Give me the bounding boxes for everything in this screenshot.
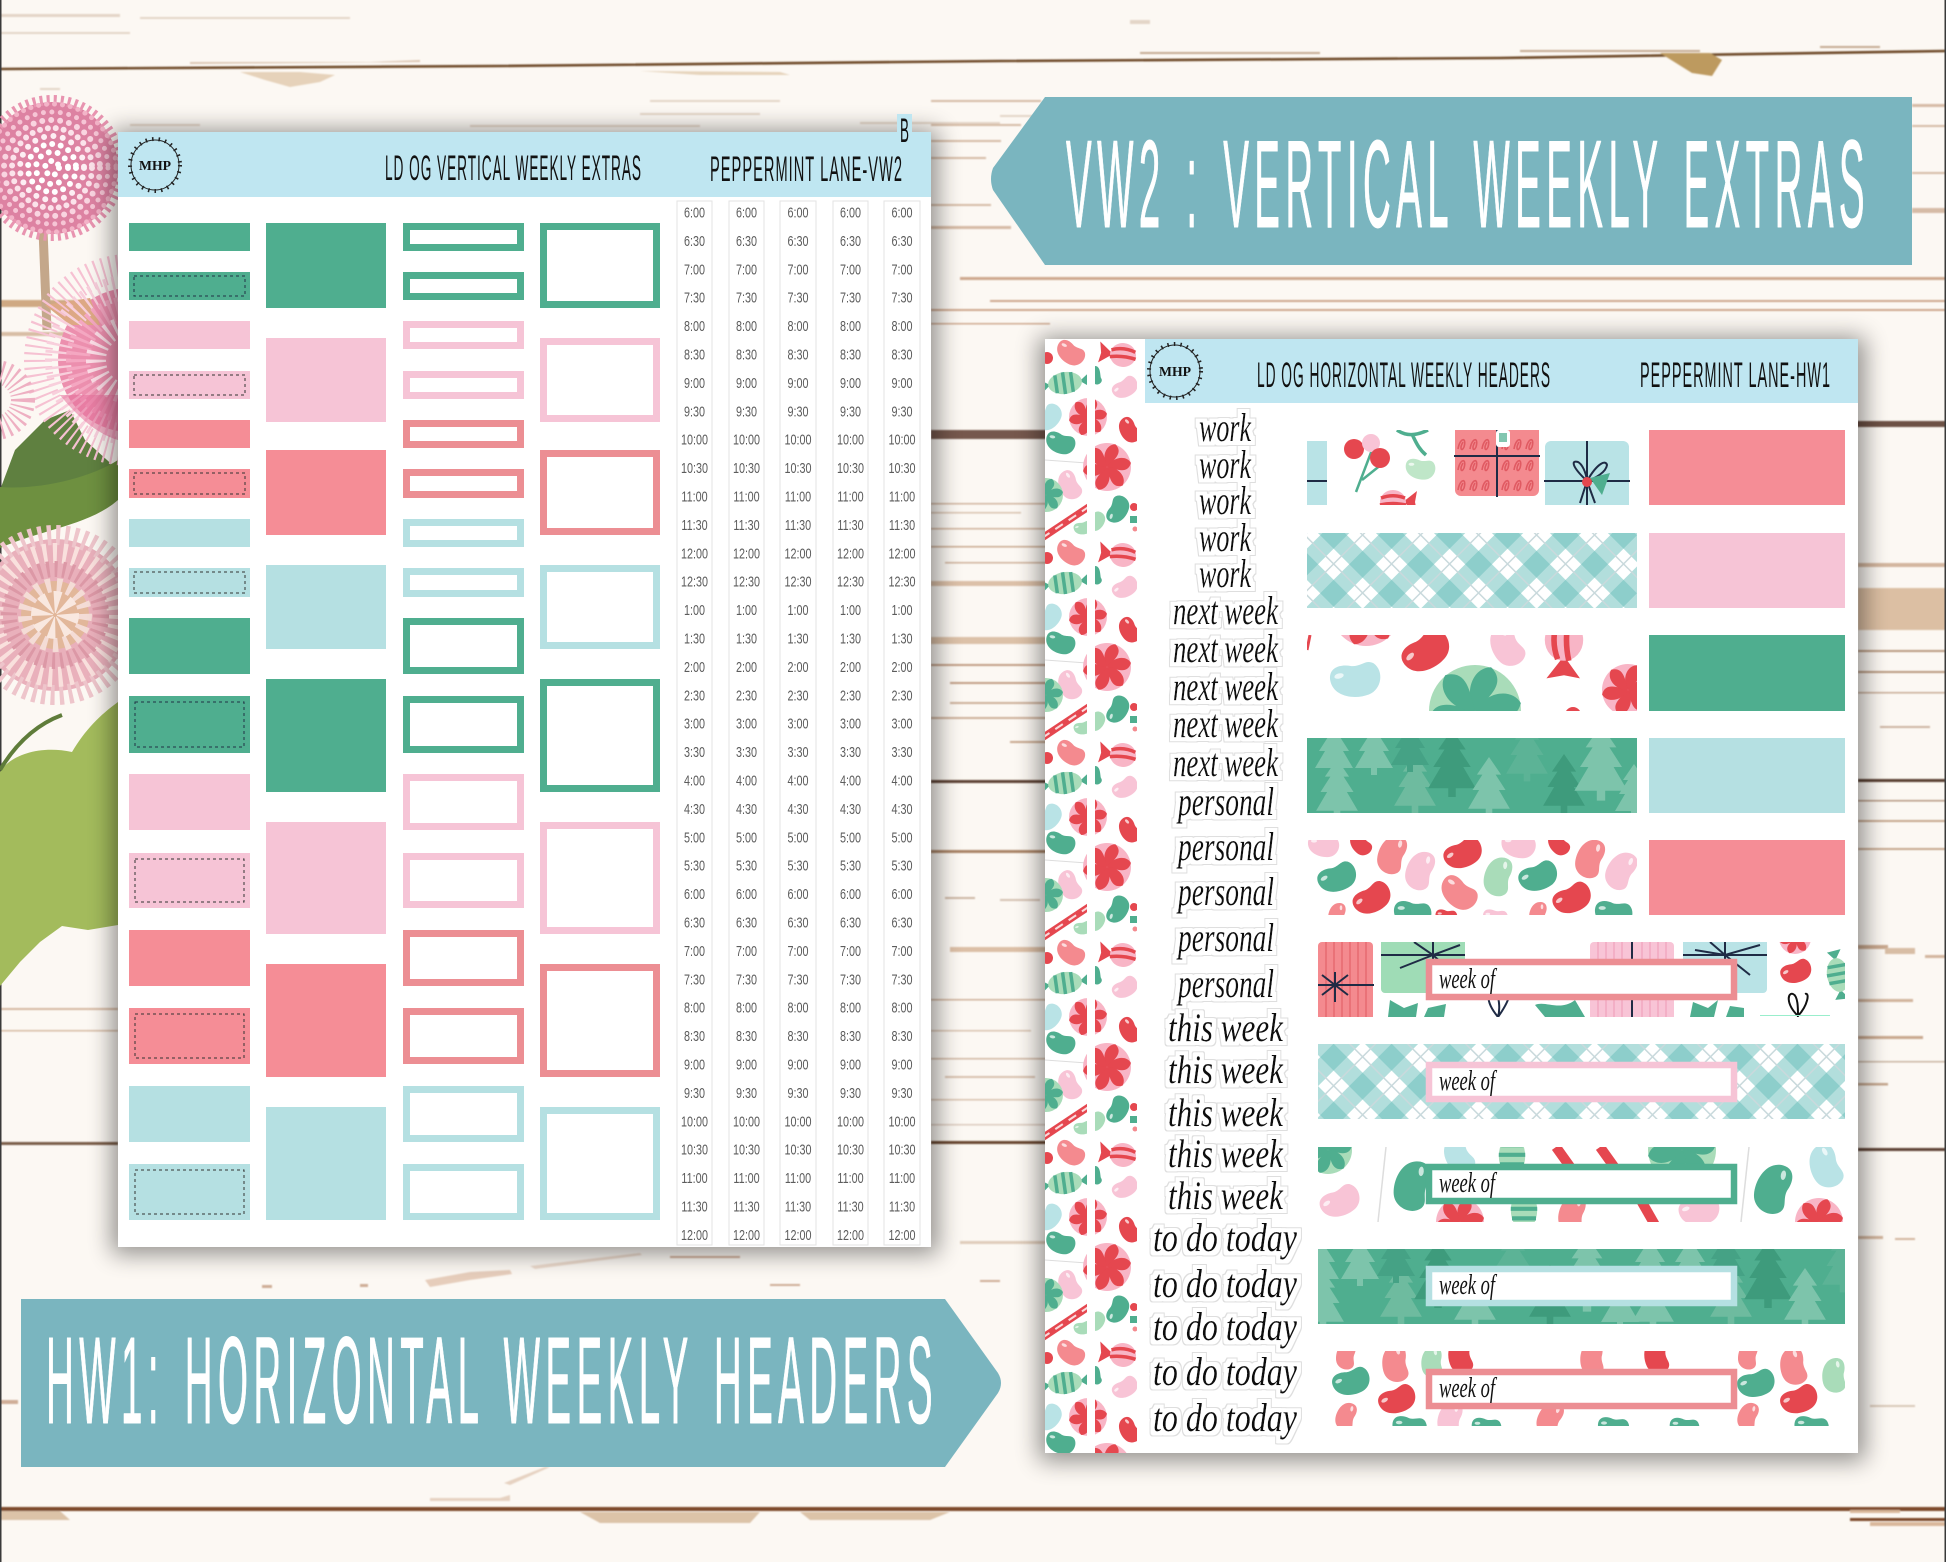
logo: MHP wreath (130, 139, 180, 191)
time strip 1: 12:30 (681, 573, 708, 590)
script word stickers: to do today: to do today (1153, 1261, 1297, 1306)
week-of label: week of (1439, 1373, 1497, 1404)
script word stickers: this week: this week (1168, 1005, 1284, 1050)
washi bar: gifts and berries (1307, 430, 1630, 505)
time strip 3: 11:00 (785, 1169, 811, 1187)
time strip 5: 9:30 (892, 1084, 912, 1101)
time strip 3: 7:00 (788, 261, 808, 278)
time strip 5: 8:00 (892, 317, 912, 335)
time strip 5: 10:30 (889, 1141, 915, 1158)
time strip 2: 1:30 (736, 630, 757, 647)
time strip 2: 10:00 (733, 431, 760, 448)
time strip 5: 5:00 (892, 829, 912, 846)
time strip 5: 5:30 (892, 857, 912, 874)
script word stickers: to do today: to do today (1153, 1395, 1297, 1440)
time strip 2: 2:30 (736, 687, 757, 704)
time strip 4: 6:00 (840, 885, 861, 903)
time strip 2: 11:30 (733, 1198, 760, 1215)
time strip 3: 6:00 (788, 204, 808, 221)
time strip 1: 5:00 (684, 829, 705, 846)
time strip 4: 9:00 (840, 374, 861, 391)
time strip 1: 9:00 (684, 1056, 705, 1073)
time strip 5: 7:00 (892, 261, 912, 278)
time strip 4: 5:30 (840, 857, 861, 874)
time strip 3: 9:00 (788, 1056, 808, 1073)
column 4: outlined full boxes (544, 226, 656, 1216)
time strip 5: 12:00 (889, 1226, 915, 1243)
time strip 3: 9:30 (788, 403, 808, 420)
time strip 4: 10:00 (837, 1113, 864, 1130)
script word stickers: work: work (1199, 515, 1252, 560)
time strip 4: 11:00 (837, 1169, 864, 1187)
time strip 3: 1:00 (788, 601, 808, 619)
time strip 4: 12:00 (837, 545, 864, 562)
time strip 4: 4:00 (840, 772, 861, 789)
script word stickers: work (1199, 405, 1252, 596)
time strip 4: 3:30 (840, 743, 861, 761)
leaf: dark green behind flower (0, 410, 118, 500)
panel: horizontal weekly headers sticker sheet (1045, 339, 1858, 1453)
time strip 1: 4:00 (684, 772, 705, 789)
time strip 4 (837, 204, 864, 1243)
time strip 5: 11:30 (889, 516, 915, 533)
time strip 3: 11:30 (785, 1198, 811, 1215)
time strip 3: 7:30 (788, 971, 808, 988)
time strip 1: 2:30 (684, 687, 705, 704)
script word stickers: to do today (1153, 1215, 1297, 1440)
time strip 5: 2:00 (892, 658, 912, 675)
time strip 5 (889, 204, 915, 1243)
time strip 5: 4:30 (892, 800, 912, 817)
week-of header: plaid (1318, 1044, 1845, 1119)
script word stickers: personal (1176, 779, 1274, 1006)
time strip 5: 1:00 (892, 601, 912, 619)
week-of label (1429, 1065, 1734, 1099)
time strip 5: 1:30 (892, 630, 912, 647)
time strip 3: 4:30 (788, 800, 808, 817)
time strip 1: 11:00 (681, 1169, 708, 1187)
time strip 5: 9:00 (892, 374, 912, 391)
time strip 5: 12:00 (889, 545, 915, 562)
time strip 3: 1:30 (788, 630, 808, 647)
script word stickers: next week: next week (1173, 701, 1279, 746)
script word stickers: this week: this week (1168, 1047, 1284, 1092)
time strip 5: 3:30 (892, 743, 912, 761)
time strip 2: 12:00 (733, 545, 760, 562)
time strip 2: 9:00 (736, 1056, 757, 1073)
leaf: curved band leaf (0, 460, 118, 548)
time strip 1: 2:00 (684, 658, 705, 675)
time strip 4: 9:30 (840, 403, 861, 420)
time strip 1: 12:00 (681, 545, 708, 562)
time strip 3: 9:30 (788, 1084, 808, 1101)
time strip 4: 10:30 (837, 1141, 864, 1158)
time strip 2: 8:30 (736, 346, 757, 363)
time strip 3: 3:00 (788, 715, 808, 732)
time strip 4: 5:00 (840, 829, 861, 846)
time strip 5: 8:00 (892, 999, 912, 1016)
time strip 2: 8:30 (736, 1027, 757, 1045)
time strip 4: 8:30 (840, 346, 861, 363)
time strip 4: 2:00 (840, 658, 861, 675)
time strip 2: 9:00 (736, 374, 757, 391)
time strip 3: 12:00 (785, 1226, 811, 1243)
solid colour block: aqua (1649, 738, 1845, 813)
time strip 1: 11:30 (681, 1198, 708, 1215)
time strip 1: 6:30 (684, 232, 705, 249)
time strip 2: 12:00 (733, 1226, 760, 1243)
sheet shadow: horizontal sheet (1039, 337, 1865, 1461)
time strip 3: 2:00 (788, 658, 808, 675)
time strip 1: 1:30 (684, 630, 705, 647)
time strip 1: 6:30 (684, 914, 705, 931)
time strip 1: 4:30 (684, 800, 705, 817)
time strip 1: 8:30 (684, 1027, 705, 1045)
time strip 1: 5:30 (684, 857, 705, 874)
washi bar: jelly beans (1308, 840, 1637, 915)
time strip 4: 8:00 (840, 999, 861, 1016)
time strip 2: 4:30 (736, 800, 757, 817)
panel: vertical weekly extras sticker sheet (118, 112, 931, 1247)
flower: middle spiky pink (0, 268, 222, 452)
time strip 4: 10:30 (837, 459, 864, 477)
header band (118, 132, 931, 197)
time strip 1: 11:00 (681, 488, 708, 505)
time strip 3: 12:30 (785, 573, 811, 590)
time strip 4: 11:30 (837, 516, 864, 533)
week-of label: week of (1439, 1168, 1497, 1199)
time strip 4: 6:00 (840, 204, 861, 221)
logo: MHP wreath: MHP (1159, 365, 1191, 380)
script word stickers: to do today: to do today (1153, 1349, 1297, 1394)
time strip 2: 10:00 (733, 1113, 760, 1130)
week-of label (1429, 1269, 1734, 1303)
time strip 2: 11:00 (733, 488, 760, 505)
time strip 3: 10:30 (785, 1141, 811, 1158)
time strip 3: 7:30 (788, 289, 808, 306)
column 3: outlined header boxes (406, 226, 520, 1216)
time strip 1: 12:00 (681, 1226, 708, 1243)
time strip 5: 7:00 (892, 942, 912, 959)
time strip 3: 5:30 (788, 857, 808, 874)
time strip 3: 5:00 (788, 829, 808, 846)
script word stickers: this week: this week (1168, 1131, 1284, 1176)
time strip 2: 6:30 (736, 914, 757, 931)
logo: MHP wreath: MHP (139, 159, 171, 174)
panel: vertical weekly extras sticker sheet: LD OG VERTICAL WEEKLY EXTRAS (385, 149, 642, 188)
script word stickers: to do today: to do today (1153, 1304, 1297, 1349)
solid colour block: green (1649, 635, 1845, 711)
time strip 3: 11:00 (785, 488, 811, 505)
week-of header: trees (1301, 1229, 1946, 1329)
time strip 1: 9:30 (684, 1084, 705, 1101)
time strip 4: 7:30 (840, 971, 861, 988)
time strip 2: 10:30 (733, 1141, 760, 1158)
time strip 5: 6:00 (892, 204, 912, 221)
time strip 5: 9:30 (892, 403, 912, 420)
time strip 1: 1:00 (684, 601, 705, 619)
time strip 1: 8:30 (684, 346, 705, 363)
time strip 3: 2:30 (788, 687, 808, 704)
time strip 4: 6:30 (840, 232, 861, 249)
time strip 5: 10:00 (889, 1113, 915, 1130)
time strip 5: 10:30 (889, 459, 915, 477)
text: PEPPERMINT LANE-VW2 (710, 150, 903, 189)
washi bar: aqua plaid (1307, 533, 1637, 608)
time strip 2: 12:30 (733, 573, 760, 590)
time strip 4: 9:30 (840, 1084, 861, 1101)
time strip 3: 10:00 (785, 1113, 811, 1130)
time strip 1: 6:00 (684, 885, 705, 903)
time strip 5: 3:00 (892, 715, 912, 732)
time strip 4: 4:30 (840, 800, 861, 817)
script word stickers: next week: next week (1173, 740, 1279, 785)
time strip 2: 3:30 (736, 743, 757, 761)
time strip 3: 6:30 (788, 232, 808, 249)
script word stickers: personal: personal (1176, 824, 1274, 869)
time strip 3: 8:30 (788, 1027, 808, 1045)
time strip 5: 7:30 (892, 971, 912, 988)
time strip 1: 6:00 (684, 204, 705, 221)
time strip 5: 9:00 (892, 1056, 912, 1073)
time strip 2: 8:00 (736, 317, 757, 335)
time strip 1: 10:30 (681, 459, 708, 477)
time strip 1: 11:30 (681, 516, 708, 533)
time strip 2: 5:00 (736, 829, 757, 846)
logo: MHP wreath (1149, 344, 1201, 398)
column 1: solid and dashed header swatches (129, 223, 250, 1220)
time strip 4: 12:30 (837, 573, 864, 590)
time strip 2: 1:00 (736, 601, 757, 619)
time strip 1 (681, 204, 708, 1243)
week-of label (1429, 962, 1734, 997)
solid colour block: coral (1649, 430, 1845, 505)
time strip 1: 10:30 (681, 1141, 708, 1158)
script word stickers: work: work (1199, 551, 1252, 596)
time strip 3: 3:30 (788, 743, 808, 761)
time strip 4: 7:00 (840, 261, 861, 278)
time strip 1: 7:30 (684, 289, 705, 306)
time strip 2: 10:30 (733, 459, 760, 477)
time strip 2: 9:30 (736, 1084, 757, 1101)
time strip 5: 7:30 (892, 289, 912, 306)
week-of label: week of (1439, 1270, 1497, 1301)
script word stickers: personal: personal (1176, 779, 1274, 824)
time strip 1: 10:00 (681, 1113, 708, 1130)
sheet tab letter B (897, 112, 912, 150)
script word stickers: next week (1173, 588, 1279, 785)
time strip 5: 11:30 (889, 1198, 915, 1215)
time strip 5: 6:30 (892, 232, 912, 249)
time strip 4: 11:30 (837, 1198, 864, 1215)
flower: top pink pompom (0, 100, 120, 236)
flowers and leaves at the left edge (0, 100, 222, 986)
candy pattern side strips (1045, 340, 1137, 1453)
flower stem (43, 230, 47, 330)
time strip 4: 1:00 (840, 601, 861, 619)
time strip 4: 9:00 (840, 1056, 861, 1073)
time strip 3: 12:00 (785, 545, 811, 562)
script word stickers: to do today: to do today (1153, 1215, 1297, 1260)
time strip 5: 8:30 (892, 346, 912, 363)
script word stickers: next week: next week (1173, 588, 1279, 633)
time strip 3: 6:00 (788, 885, 808, 903)
week-of label: week of (1439, 964, 1497, 995)
time strip 2: 2:00 (736, 658, 757, 675)
week-of header: gifts (1318, 922, 1853, 1022)
time strip 1: 8:00 (684, 999, 705, 1016)
washi bar: green trees (1307, 738, 1637, 813)
time strip 1: 7:00 (684, 942, 705, 959)
time strip 4: 7:30 (840, 289, 861, 306)
time strip 4: 6:30 (840, 914, 861, 931)
time strip 4: 10:00 (837, 431, 864, 448)
time strip 1: 3:00 (684, 715, 705, 732)
time strip 3: 4:00 (788, 772, 808, 789)
week-of label: week of (1439, 1066, 1497, 1097)
script word stickers: this week (1168, 1005, 1284, 1218)
time strip 1: 7:00 (684, 261, 705, 278)
time strip 2: 6:00 (736, 885, 757, 903)
week-of header: candies (1302, 1116, 1849, 1246)
time strip 1: 7:30 (684, 971, 705, 988)
time strip 5: 11:00 (889, 488, 915, 505)
leaf: big light green leaf (0, 702, 118, 986)
time strip 4: 8:00 (840, 317, 861, 335)
time strip 2: 11:30 (733, 516, 760, 533)
time strip 2: 7:00 (736, 261, 757, 278)
time strip 2 (733, 204, 760, 1243)
time strip 3: 9:00 (788, 374, 808, 391)
time strip 2: 8:00 (736, 999, 757, 1016)
time strip 5: 6:00 (892, 885, 912, 903)
solid colour block: coral (1649, 840, 1845, 915)
script word stickers: work: work (1199, 405, 1252, 450)
time strip 2: 9:30 (736, 403, 757, 420)
script word stickers: this week: this week (1168, 1173, 1284, 1218)
time strip 3: 8:00 (788, 999, 808, 1016)
banner arrow: HW1 horizontal weekly headers (21, 1299, 1001, 1467)
script word stickers: this week: this week (1168, 1090, 1284, 1135)
time strip 1: 10:00 (681, 431, 708, 448)
time strip 1: 9:30 (684, 403, 705, 420)
script word stickers: next week: next week (1173, 626, 1279, 671)
week-of label (1429, 1167, 1734, 1201)
washi bar: candies on white (1307, 635, 1637, 711)
script word stickers: personal: personal (1176, 915, 1274, 960)
flower: lower pale pink (0, 535, 135, 695)
time strip 4: 12:00 (837, 1226, 864, 1243)
time strip 1: 8:00 (684, 317, 705, 335)
time strip 5: 6:30 (892, 914, 912, 931)
time strip 2: 4:00 (736, 772, 757, 789)
time strip 2: 7:30 (736, 289, 757, 306)
time strip outlines (677, 201, 920, 1245)
time strip 5: 2:30 (892, 687, 912, 704)
leaf stem (0, 715, 62, 770)
time strip 2: 7:30 (736, 971, 757, 988)
time strip 2: 3:00 (736, 715, 757, 732)
time strip 4: 2:30 (840, 687, 861, 704)
time strip 5: 4:00 (892, 772, 912, 789)
week-of label (1429, 1372, 1734, 1406)
time strip 3: 8:30 (788, 346, 808, 363)
column 2: solid full boxes (266, 223, 386, 1220)
time strip 4: 7:00 (840, 942, 861, 959)
script word stickers: next week: next week (1173, 664, 1279, 709)
header band (1145, 339, 1858, 403)
time strip 2: 11:00 (733, 1169, 760, 1187)
script word stickers: personal: personal (1176, 869, 1274, 914)
time strip 3: 11:30 (785, 516, 811, 533)
time strip 1: 9:00 (684, 374, 705, 391)
script word stickers: work: work (1199, 442, 1252, 487)
time strip 5: 12:30 (889, 573, 915, 590)
time strip 3: 6:30 (788, 914, 808, 931)
time strip 5: 11:00 (889, 1169, 915, 1187)
script word stickers: work: work (1199, 478, 1252, 523)
time strip 1: 3:30 (684, 743, 705, 761)
time strip 4: 11:00 (837, 488, 864, 505)
time strip 5: 8:30 (892, 1027, 912, 1045)
time strip 5: 10:00 (889, 431, 915, 448)
time strip 4: 3:00 (840, 715, 861, 732)
time strip 3: 10:00 (785, 431, 811, 448)
time strip 4: 1:30 (840, 630, 861, 647)
time strip 2: 6:00 (736, 204, 757, 221)
time strip 3 (785, 204, 811, 1243)
sheet tab letter B: B (900, 112, 909, 150)
time strip 2: 5:30 (736, 857, 757, 874)
time strip 2: 6:30 (736, 232, 757, 249)
script word stickers: personal: personal (1176, 961, 1274, 1006)
sheet shadow: vertical sheet (112, 130, 938, 1254)
time strip 2: 7:00 (736, 942, 757, 959)
week-of header: jelly beans (1329, 1336, 1849, 1440)
time strip 3: 10:30 (785, 459, 811, 477)
time strip 3: 8:00 (788, 317, 808, 335)
solid colour block: pink (1649, 533, 1845, 608)
time strip 3: 7:00 (788, 942, 808, 959)
time strip 4: 8:30 (840, 1027, 861, 1045)
